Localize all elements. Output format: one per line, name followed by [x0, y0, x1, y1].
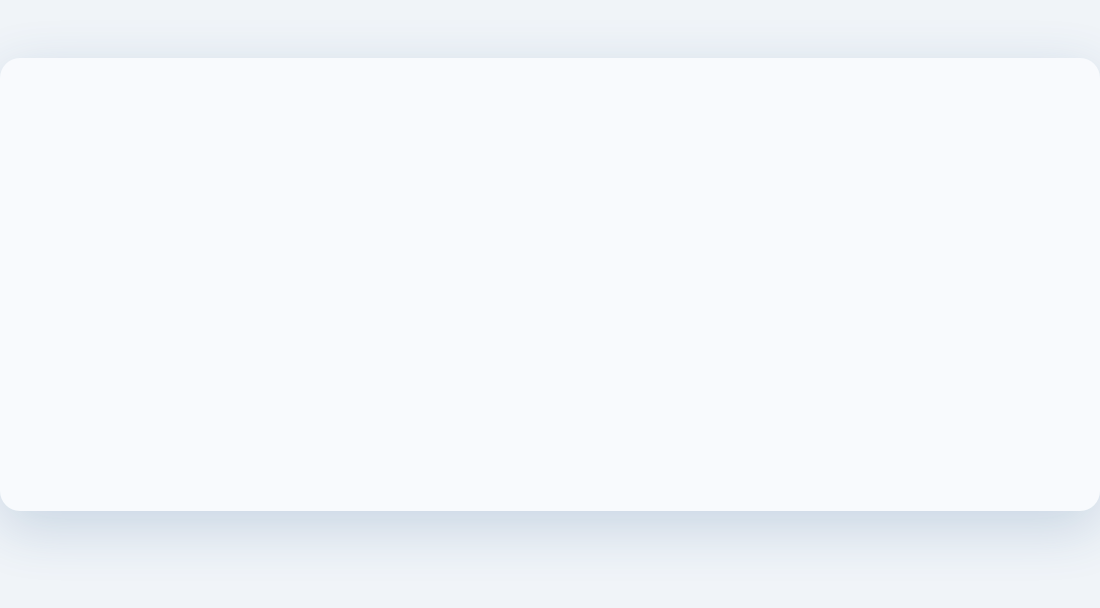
- panel: blank card: [0, 58, 1100, 511]
